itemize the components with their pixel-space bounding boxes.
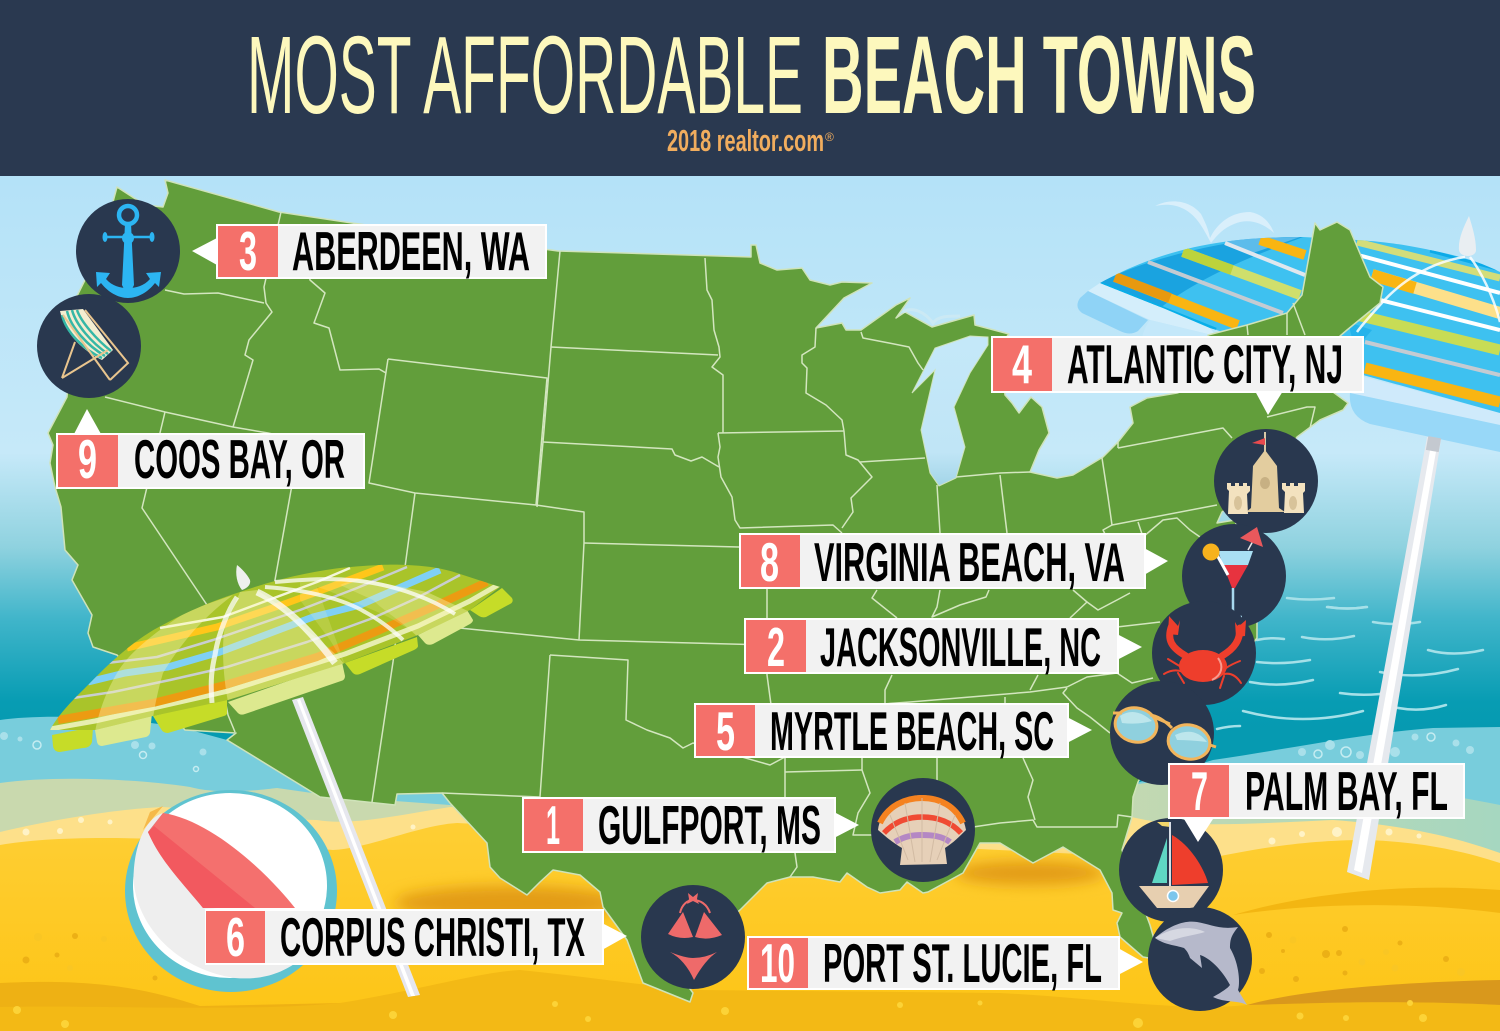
label: rank 6 Corpus Christi — [206, 906, 627, 968]
title: MOST AFFORDABLE — [247, 14, 803, 137]
sea waves — [1217, 598, 1483, 729]
faint gull over the upper peninsula — [903, 310, 960, 323]
label: rank 9 Coos Bay: COOS BAY, OR — [134, 428, 345, 490]
icon: anchor — [76, 199, 180, 303]
left beach umbrella — [40, 555, 520, 997]
label: rank 2 Jacksonville: 2 — [767, 616, 785, 678]
label: rank 10 Port St. Lucie: PORT ST. LUCIE, FL — [823, 932, 1102, 994]
source line: 2018 realtor.com — [667, 123, 824, 158]
right umbrella canopy — [1090, 230, 1500, 420]
state borders — [105, 212, 1315, 877]
label: rank 9 Coos Bay — [57, 409, 364, 490]
label: rank 5 Myrtle Beach — [695, 700, 1092, 762]
label: rank 6 Corpus Christi: CORPUS CHRISTI, TX — [280, 906, 585, 968]
label: rank 3 Aberdeen — [192, 220, 546, 282]
label: rank 7 Palm Bay: 7 — [1191, 760, 1208, 822]
source line: ® — [825, 130, 834, 144]
icon: scallop shell — [871, 778, 975, 882]
icon: cocktail — [1182, 524, 1286, 628]
label: rank 7 Palm Bay — [1169, 760, 1464, 822]
label: rank 3 Aberdeen: 3 — [239, 220, 257, 282]
foam bubbles and sand speckles — [0, 732, 1474, 1028]
left umbrella scallops — [52, 588, 513, 752]
label: rank 5 Myrtle Beach: 5 — [716, 700, 735, 762]
label: rank 8 Virginia Beach — [740, 531, 1168, 593]
label: rank 6 Corpus Christi: 6 — [226, 906, 245, 968]
label: rank 8 Virginia Beach: VIRGINIA BEACH, VA — [814, 531, 1125, 593]
right umbrella pole — [1347, 436, 1441, 880]
left umbrella pole — [292, 697, 420, 997]
right umbrella finial — [1459, 216, 1476, 256]
right beach umbrella — [1077, 216, 1500, 880]
arrow: Palm Bay marker — [1184, 819, 1213, 842]
icon: sailboat — [1119, 818, 1223, 922]
label: rank 1 Gulfport: GULFPORT, MS — [598, 794, 821, 856]
right umbrella ribs — [1357, 257, 1500, 332]
icon: deck chair — [37, 294, 141, 398]
icon: sunglasses — [1110, 681, 1216, 785]
icon: dolphin — [1148, 907, 1252, 1011]
label: rank 2 Jacksonville: JACKSONVILLE, NC — [820, 616, 1101, 678]
left umbrella canopy — [50, 564, 500, 730]
source line — [667, 123, 834, 158]
label: rank 1 Gulfport: 1 — [546, 794, 560, 856]
icon: sand castle — [1214, 429, 1318, 533]
icon: crab — [1152, 601, 1256, 705]
lighter alternating umbrella panels — [95, 578, 470, 732]
map of the contiguous United States — [48, 180, 1383, 1002]
left umbrella ribs — [211, 579, 455, 703]
label: rank 8 Virginia Beach: 8 — [760, 531, 779, 593]
label: rank 10 Port St. Lucie — [748, 932, 1143, 994]
label: rank 1 Gulfport — [523, 794, 859, 856]
left umbrella finial — [236, 565, 250, 590]
lake michigan — [912, 336, 988, 486]
label: rank 9 Coos Bay: 9 — [78, 428, 97, 490]
label: rank 10 Port St. Lucie: 10 — [760, 932, 795, 994]
label: rank 2 Jacksonville — [745, 616, 1142, 678]
label: rank 5 Myrtle Beach: MYRTLE BEACH, SC — [770, 700, 1054, 762]
label: rank 3 Aberdeen: ABERDEEN, WA — [292, 220, 530, 282]
label: rank 4 Atlantic City — [992, 333, 1363, 415]
right umbrella scallops — [1077, 283, 1500, 452]
icon: bikini — [641, 885, 745, 989]
beach ball — [125, 790, 337, 992]
header band — [0, 0, 1500, 176]
label: rank 4 Atlantic City: 4 — [1012, 333, 1032, 395]
seagull — [1155, 201, 1274, 243]
